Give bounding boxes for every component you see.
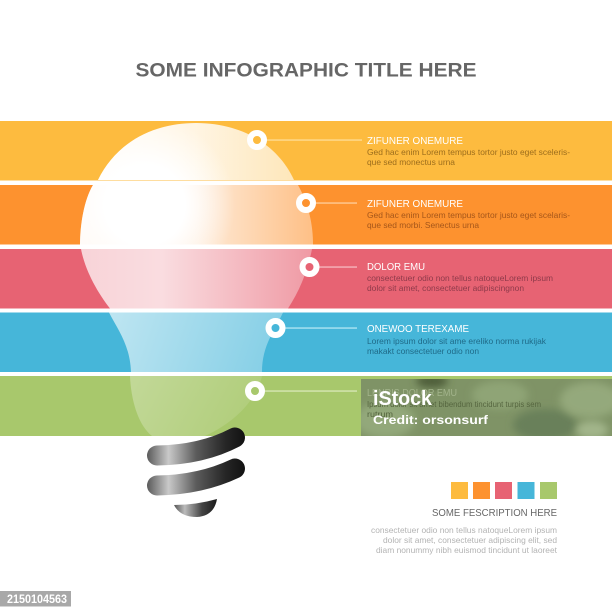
pointer: band 5 — [248, 384, 357, 398]
legend swatches — [451, 482, 557, 499]
text: band 2: que sed morbi. Senectus urna — [367, 220, 479, 230]
hidden band 5 text under watermark: LENRIS DOLOR EMU — [367, 387, 457, 399]
text: band 1: Ged hac enim Lorem tempus tortor justo eget sceleris- — [367, 147, 570, 157]
text: band 4: ONEWOO TEREXAME — [367, 323, 469, 335]
text: band 4 — [367, 323, 547, 356]
image id tag: 2150104563 — [7, 594, 67, 606]
description text: consectetuer odio non tellus natoqueLorem ipsum — [371, 525, 557, 535]
text: band 1: ZIFUNER ONEMURE — [367, 135, 463, 147]
hidden band 5 text under watermark: Ipsum dolor sit amet bibendum tincidunt turpis sem — [367, 399, 541, 409]
text: band 2: ZIFUNER ONEMURE — [367, 198, 463, 210]
image id tag — [0, 591, 71, 606]
text: band 1: que sed monectus urna — [367, 157, 455, 167]
description heading: SOME FESCRIPTION HERE — [432, 508, 557, 519]
pointer: band 3 — [302, 260, 357, 274]
text: band 3: consectetuer odio non tellus natoqueLorem ipsum — [367, 273, 553, 283]
text: band 2: Ged hac enim Lorem tempus tortor justo eget scelaris- — [367, 210, 570, 220]
watermark brand: iStock — [373, 388, 433, 410]
text: band 3: DOLOR EMU — [367, 261, 425, 273]
pointer: band 2 — [299, 196, 357, 210]
pointer: band 4 — [268, 321, 357, 335]
text: band 1 — [367, 135, 570, 167]
text: band 3 — [367, 261, 553, 293]
description text: dolor sit amet, consectetuer adipiscing elit, sed — [383, 535, 557, 545]
text: band 4: Lorem ipsum dolor sit ame ereliko norma rukijak — [367, 336, 547, 346]
title: SOME INFOGRAPHIC TITLE HERE — [136, 60, 476, 82]
text: band 4: makakt consectetuer odio non — [367, 346, 479, 356]
hidden band 5 text under watermark: rutrum — [367, 409, 393, 419]
text: band 2 — [367, 198, 570, 230]
watermark credit: Credit: orsonsurf — [373, 413, 489, 427]
coloured bands — [0, 121, 612, 436]
hidden band 5 text under watermark — [367, 387, 541, 419]
pointer: band 1 — [250, 133, 362, 147]
text: band 3: dolor sit amet, consectetuer adipiscingnon — [367, 283, 524, 293]
light bulb screw base — [157, 438, 235, 517]
watermark panel — [361, 379, 612, 436]
description text — [371, 525, 558, 555]
description text: diam nonummy nibh euismod tincidunt ut laoreet — [376, 545, 558, 555]
light bulb glass — [80, 123, 313, 436]
